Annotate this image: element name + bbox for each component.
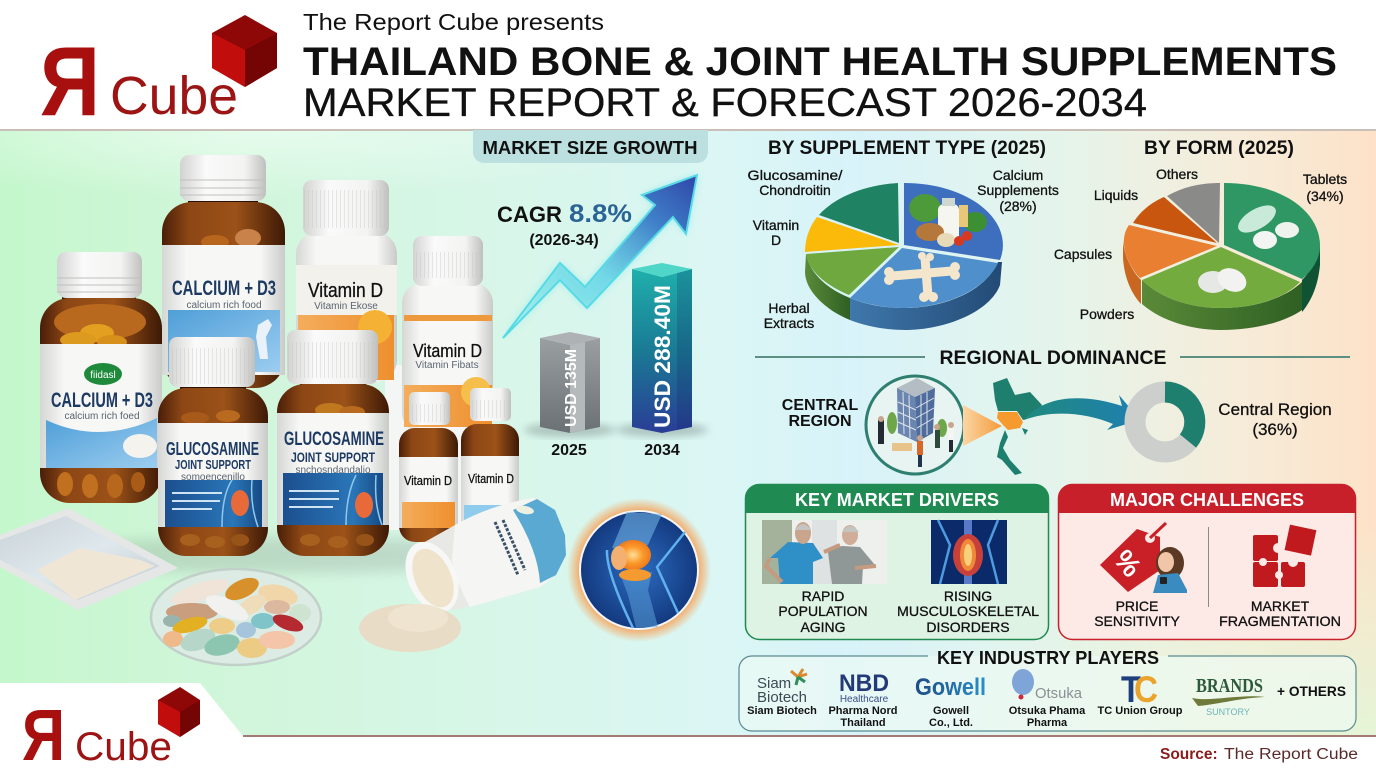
- panel: market size growth: [473, 130, 708, 459]
- logo: NBD Healthcare: Pharma Nord: [828, 705, 898, 717]
- label: rapid population aging: AGING: [800, 619, 846, 635]
- bottle: Glucosamine left: GLUCOSAMINE: [166, 439, 259, 459]
- label: market fragmentation: FRAGMENTATION: [1219, 613, 1341, 629]
- panel: major challenges: [1058, 484, 1356, 640]
- donut chart: [1135, 392, 1195, 452]
- background: [0, 130, 1376, 736]
- icon: office building circle: [866, 376, 964, 474]
- labels: supplement type: D: [771, 232, 781, 248]
- slice: tablets: [1224, 183, 1320, 279]
- slice: liquids: [1133, 197, 1217, 243]
- bottle: Calcium + D3 front: fiidasl: [90, 370, 116, 381]
- logo: Siam Biotech: Biotech: [757, 689, 807, 706]
- bottle: Calcium + D3 back: calcium rich food: [186, 300, 262, 311]
- label: rising musculoskeletal disorders: RISING: [944, 588, 992, 604]
- labels: form: [1054, 166, 1347, 322]
- bottle: Vitamin D white back: Vitamin Ekose: [314, 301, 378, 312]
- divider: [1208, 527, 1209, 607]
- labels: form: Powders: [1080, 306, 1134, 322]
- labels: supplement type: Glucosamine/: [748, 167, 843, 183]
- label: rapid population aging: [778, 588, 868, 635]
- photo: spine scan: [931, 520, 1007, 584]
- header band: [0, 0, 1376, 131]
- label: rapid population aging: RAPID: [802, 588, 844, 604]
- icon: tablets: [1234, 200, 1299, 249]
- bottle: Calcium + D3 front: calcium rich foed: [64, 411, 140, 422]
- pedestal behind bottles: [20, 365, 540, 573]
- labels: form: Others: [1156, 166, 1198, 182]
- bottle: Glucosamine right: [277, 330, 389, 556]
- heading: major challenges: [1058, 484, 1356, 513]
- label: price sensitivity: PRICE: [1116, 598, 1158, 614]
- panel: key industry players: [739, 648, 1356, 731]
- bottle: Calcium + D3 back: CALCIUM + D3: [172, 277, 276, 300]
- slice: others: [1167, 183, 1220, 243]
- slice: powders: [1142, 247, 1300, 308]
- CAGR label: (2026-34): [529, 232, 599, 249]
- logo: RCube top: Cube: [110, 66, 238, 126]
- bottle: Vitamin D white back: [296, 180, 397, 382]
- label: price sensitivity: SENSITIVITY: [1094, 613, 1180, 629]
- label: central region share: (36%): [1252, 420, 1298, 439]
- heading: key market drivers: [745, 484, 1049, 513]
- glass dish of pills: [151, 569, 321, 665]
- labels: supplement type: (28%): [999, 198, 1037, 214]
- heading: by form: BY FORM (2025): [1144, 138, 1294, 159]
- logo: Otsuka: Pharma: [1027, 717, 1068, 729]
- labels: supplement type: Extracts: [764, 315, 814, 331]
- map: Thailand: [993, 378, 1042, 475]
- heading: key industry players: KEY INDUSTRY PLAYERS: [937, 648, 1159, 668]
- header title text: MARKET REPORT & FORECAST 2026-2034: [303, 81, 1147, 125]
- bar: 2025: [524, 332, 616, 459]
- bottle: small Vitamin D left: Vitamin D: [404, 473, 452, 488]
- label: others: + OTHERS: [1277, 683, 1346, 699]
- logo: Siam Biotech: [747, 669, 817, 717]
- heading: regional dominance: REGIONAL DOMINANCE: [940, 348, 1166, 369]
- logo: TC Union Group: T: [1121, 669, 1141, 710]
- label: price sensitivity: [1094, 598, 1180, 629]
- label: market fragmentation: MARKET: [1251, 598, 1310, 614]
- label: central region share: Central Region: [1218, 400, 1332, 419]
- source: [1160, 746, 1358, 763]
- icon: knee joint: [567, 498, 711, 642]
- curved arrow: [1024, 395, 1140, 430]
- slice: herbal: [806, 247, 899, 295]
- bottle: Glucosamine left: somoencenillo: [181, 472, 245, 483]
- bar: 2034: 2034: [644, 442, 680, 459]
- slice: glucosamine: [819, 183, 899, 243]
- source: The Report Cube: [1224, 746, 1358, 763]
- bottle: small Vitamin D left: [399, 392, 458, 542]
- heading: major challenges: MAJOR CHALLENGES: [1110, 490, 1304, 510]
- logo: Otsuka: [1009, 669, 1086, 729]
- CAGR label: CAGR: [497, 202, 562, 227]
- bottle: Calcium + D3 front: CALCIUM + D3: [51, 389, 153, 412]
- logo: Gowell: [915, 674, 986, 729]
- heading: market size growth: [473, 130, 708, 163]
- logo: RCube bottom: [0, 683, 1376, 768]
- CAGR label: [497, 200, 632, 249]
- bottle: Glucosamine right: JOINT SUPPORT: [291, 449, 375, 465]
- label: central region share: [1218, 400, 1332, 439]
- pie chart panel: by supplement type: [748, 138, 1059, 331]
- label: central region: REGION: [788, 413, 852, 430]
- labels: supplement type: Chondroitin: [759, 182, 831, 198]
- bottle: Glucosamine left: [158, 337, 268, 556]
- icon: powder tablets: [1198, 264, 1250, 296]
- labels: supplement type: Vitamin: [753, 217, 799, 233]
- bar: 2034: [616, 263, 708, 459]
- logo: TC Union Group: [1098, 669, 1183, 717]
- powder sachet: [0, 508, 178, 610]
- icon: puzzle pieces: [1253, 525, 1316, 587]
- logo: Brands Suntory: [1192, 675, 1265, 717]
- icon: food: [909, 194, 987, 247]
- slice: bone: [850, 248, 998, 308]
- logo: Otsuka: Otsuka: [1035, 685, 1083, 702]
- triangle pointer: [963, 405, 1002, 446]
- pie sides: [805, 254, 1002, 330]
- icon: price tag with woman: %: [1108, 544, 1148, 583]
- label: rising musculoskeletal disorders: DISORDERS: [926, 619, 1010, 635]
- header title text: THAILAND BONE & JOINT HEALTH SUPPLEMENTS: [303, 40, 1337, 84]
- logo: Gowell: Gowell: [915, 674, 986, 701]
- photo: aging couple exercising: [762, 520, 887, 584]
- slice: vitamin D: [805, 217, 899, 252]
- bar: 2025: 2025: [551, 442, 587, 459]
- label: rising musculoskeletal disorders: [897, 588, 1039, 635]
- logo: NBD Healthcare: Healthcare: [840, 694, 889, 705]
- bottle: Vitamin D white right: Vitamin D: [413, 341, 482, 361]
- logo: Otsuka: Otsuka Phama: [1009, 705, 1086, 717]
- bottle: Glucosamine right: GLUCOSAMINE: [284, 429, 384, 450]
- labels: supplement type: Supplements: [977, 182, 1059, 198]
- bottle: small Vitamin D right: [461, 388, 519, 534]
- CAGR label: 8.8%: [569, 200, 632, 228]
- panel: regional dominance: [755, 348, 1350, 475]
- label: rising musculoskeletal disorders: MUSCULOSKELETAL: [897, 603, 1039, 619]
- labels: supplement type: Herbal: [768, 300, 810, 316]
- heading: by supplement type: BY SUPPLEMENT TYPE (2025): [768, 138, 1046, 159]
- bottle: Glucosamine left: JOINT SUPPORT: [175, 457, 251, 472]
- logo: TC Union Group: C: [1134, 669, 1158, 710]
- heading: market size growth: MARKET SIZE GROWTH: [482, 138, 698, 158]
- logo: RCube bottom: Cube: [75, 725, 172, 768]
- label: central region: CENTRAL: [782, 397, 858, 414]
- header title text: [303, 9, 1337, 125]
- bottle: Calcium + D3 front: [40, 252, 162, 503]
- logo: NBD Healthcare: NBD: [839, 670, 889, 697]
- labels: supplement type: [748, 167, 1059, 331]
- logo: NBD Healthcare: Thailand: [840, 717, 886, 729]
- logo: Brands Suntory: BRANDS: [1196, 675, 1263, 697]
- logo: NBD Healthcare: [828, 670, 898, 729]
- bottle: Calcium + D3 back: [162, 155, 285, 388]
- logo: RCube top: Я: [40, 26, 100, 136]
- icon: bone: [884, 252, 960, 302]
- bottle: Vitamin D white back: Vitamin D: [308, 280, 383, 302]
- slice: capsules: [1124, 225, 1217, 278]
- pie sides: [1123, 240, 1320, 330]
- labels: supplement type: Calcium: [993, 167, 1043, 183]
- labels: form: Capsules: [1054, 246, 1112, 262]
- label: rapid population aging: POPULATION: [778, 603, 868, 619]
- bottle: Glucosamine right: snchosndandalio: [295, 465, 371, 476]
- logo: Brands Suntory: SUNTORY: [1206, 707, 1250, 717]
- logo: TC Union Group: TC Union Group: [1098, 705, 1183, 717]
- logo: Siam Biotech: Siam: [757, 675, 791, 692]
- logo: Siam Biotech: Siam Biotech: [747, 705, 817, 717]
- header title text: The Report Cube presents: [303, 9, 604, 35]
- bar: 2034: USD 288.40M: [650, 285, 675, 428]
- bottle: Vitamin D white right: [402, 236, 493, 433]
- source: Source:: [1160, 746, 1218, 763]
- labels: form: Liquids: [1094, 187, 1138, 203]
- labels: form: (34%): [1306, 188, 1344, 204]
- fallen bottle with powder: [359, 498, 567, 652]
- heading: key market drivers: KEY MARKET DRIVERS: [795, 490, 999, 510]
- slice: calcium: [904, 183, 1003, 260]
- logo: RCube top: [40, 15, 277, 136]
- logo: Gowell: Gowell: [933, 705, 969, 717]
- growth arrow: [503, 175, 697, 338]
- label: market fragmentation: [1219, 598, 1341, 629]
- panel: key market drivers: [745, 484, 1049, 640]
- bar: 2025: USD 135M: [563, 349, 580, 427]
- bottle: small Vitamin D right: Vitamin D: [468, 471, 514, 486]
- labels: form: Tablets: [1303, 171, 1347, 187]
- pie chart panel: by form: [1054, 138, 1347, 330]
- label: central region: [782, 397, 858, 430]
- bottle: Vitamin D white right: Vitamin Fibats: [415, 360, 479, 371]
- logo: Gowell: Co., Ltd.: [929, 717, 973, 729]
- icon: price tag with woman: [1100, 523, 1187, 593]
